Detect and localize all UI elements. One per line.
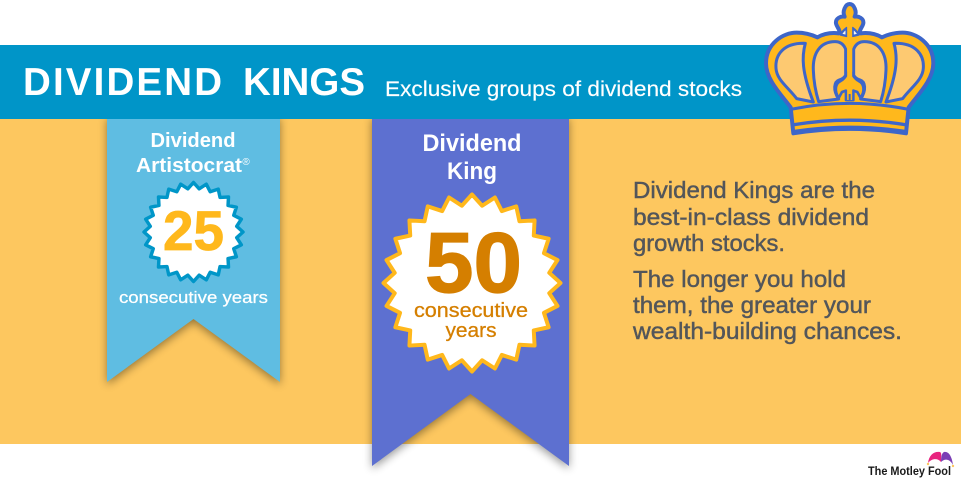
logo: The Motley Fool: The Motley Fool (868, 466, 951, 478)
seal: 50 consecutive years: 50 (425, 216, 522, 311)
logo: The Motley Fool (868, 452, 954, 478)
title: KINGS (243, 61, 365, 104)
body text: Dividend Kings are the (633, 177, 875, 203)
ribbon title: Dividend Artistocrat (136, 130, 250, 177)
seal: 50 consecutive years: consecutive (414, 300, 528, 322)
seal: 25 (144, 182, 243, 282)
seal: 25: 25 (163, 199, 224, 262)
body text: wealth-building chances. (632, 318, 902, 344)
ribbon title: Dividend Artistocrat: Dividend (150, 130, 236, 152)
header band (0, 45, 961, 119)
ribbon: Dividend Aristocrat (107, 119, 280, 385)
crown ornaments: fleurs and stem (836, 6, 864, 100)
seal: 50 consecutive years: years (446, 320, 496, 342)
icon: jester hat (927, 452, 954, 467)
ribbon caption: consecutive years (119, 288, 268, 307)
ribbon title: Dividend King (422, 130, 522, 185)
ribbon title: Dividend Artistocrat: Artistocrat (136, 155, 242, 177)
body text: The longer you hold (633, 266, 846, 292)
body text: growth stocks. (633, 230, 785, 256)
body text: them, the greater your (633, 292, 871, 318)
seal: 50 consecutive years (384, 194, 560, 372)
subtitle: Exclusive groups of dividend stocks (385, 78, 742, 101)
background panel: yellow (0, 119, 961, 444)
ribbon title: Dividend King: King (447, 158, 497, 185)
ribbon title: Dividend Artistocrat: ® (242, 157, 250, 168)
body text: best-in-class dividend (633, 204, 869, 230)
ribbon title: Dividend King: Dividend (422, 130, 522, 157)
icon: crown (766, 4, 933, 133)
body text (632, 177, 902, 344)
title: DIVIDEND (23, 61, 222, 104)
ribbon: Dividend King (372, 119, 569, 469)
title (23, 61, 365, 104)
